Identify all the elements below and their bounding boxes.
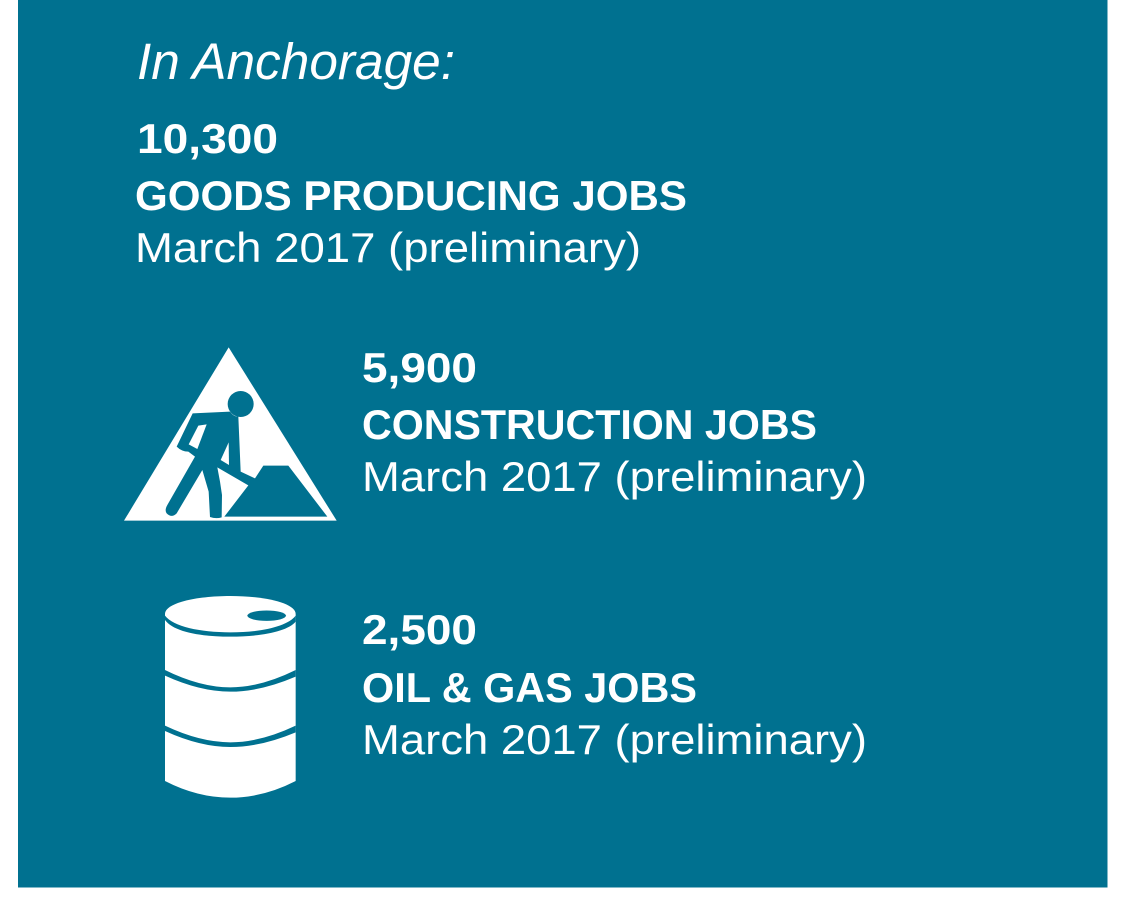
heading: In Anchorage: In Anchorage: xyxy=(137,33,455,90)
stat: oil and gas jobs xyxy=(362,606,867,763)
stat: oil and gas jobs: OIL & GAS JOBS xyxy=(362,664,697,711)
stat: construction jobs: March 2017 (preliminary) xyxy=(362,453,867,500)
stat: oil and gas jobs: March 2017 (preliminary) xyxy=(362,716,867,763)
icon: construction worker sign xyxy=(124,347,337,521)
stat: goods producing jobs xyxy=(135,115,687,271)
icon: oil barrel xyxy=(165,596,296,798)
stat: oil and gas jobs: 2,500 xyxy=(362,606,477,653)
stat: goods producing jobs: March 2017 (preliminary) xyxy=(135,224,641,271)
stat: construction jobs: 5,900 xyxy=(362,344,477,391)
stat: goods producing jobs: 10,300 xyxy=(137,115,278,162)
stat: goods producing jobs: GOODS PRODUCING JOBS xyxy=(135,172,687,219)
stat: construction jobs: CONSTRUCTION JOBS xyxy=(362,401,817,448)
stat: construction jobs xyxy=(362,344,867,500)
